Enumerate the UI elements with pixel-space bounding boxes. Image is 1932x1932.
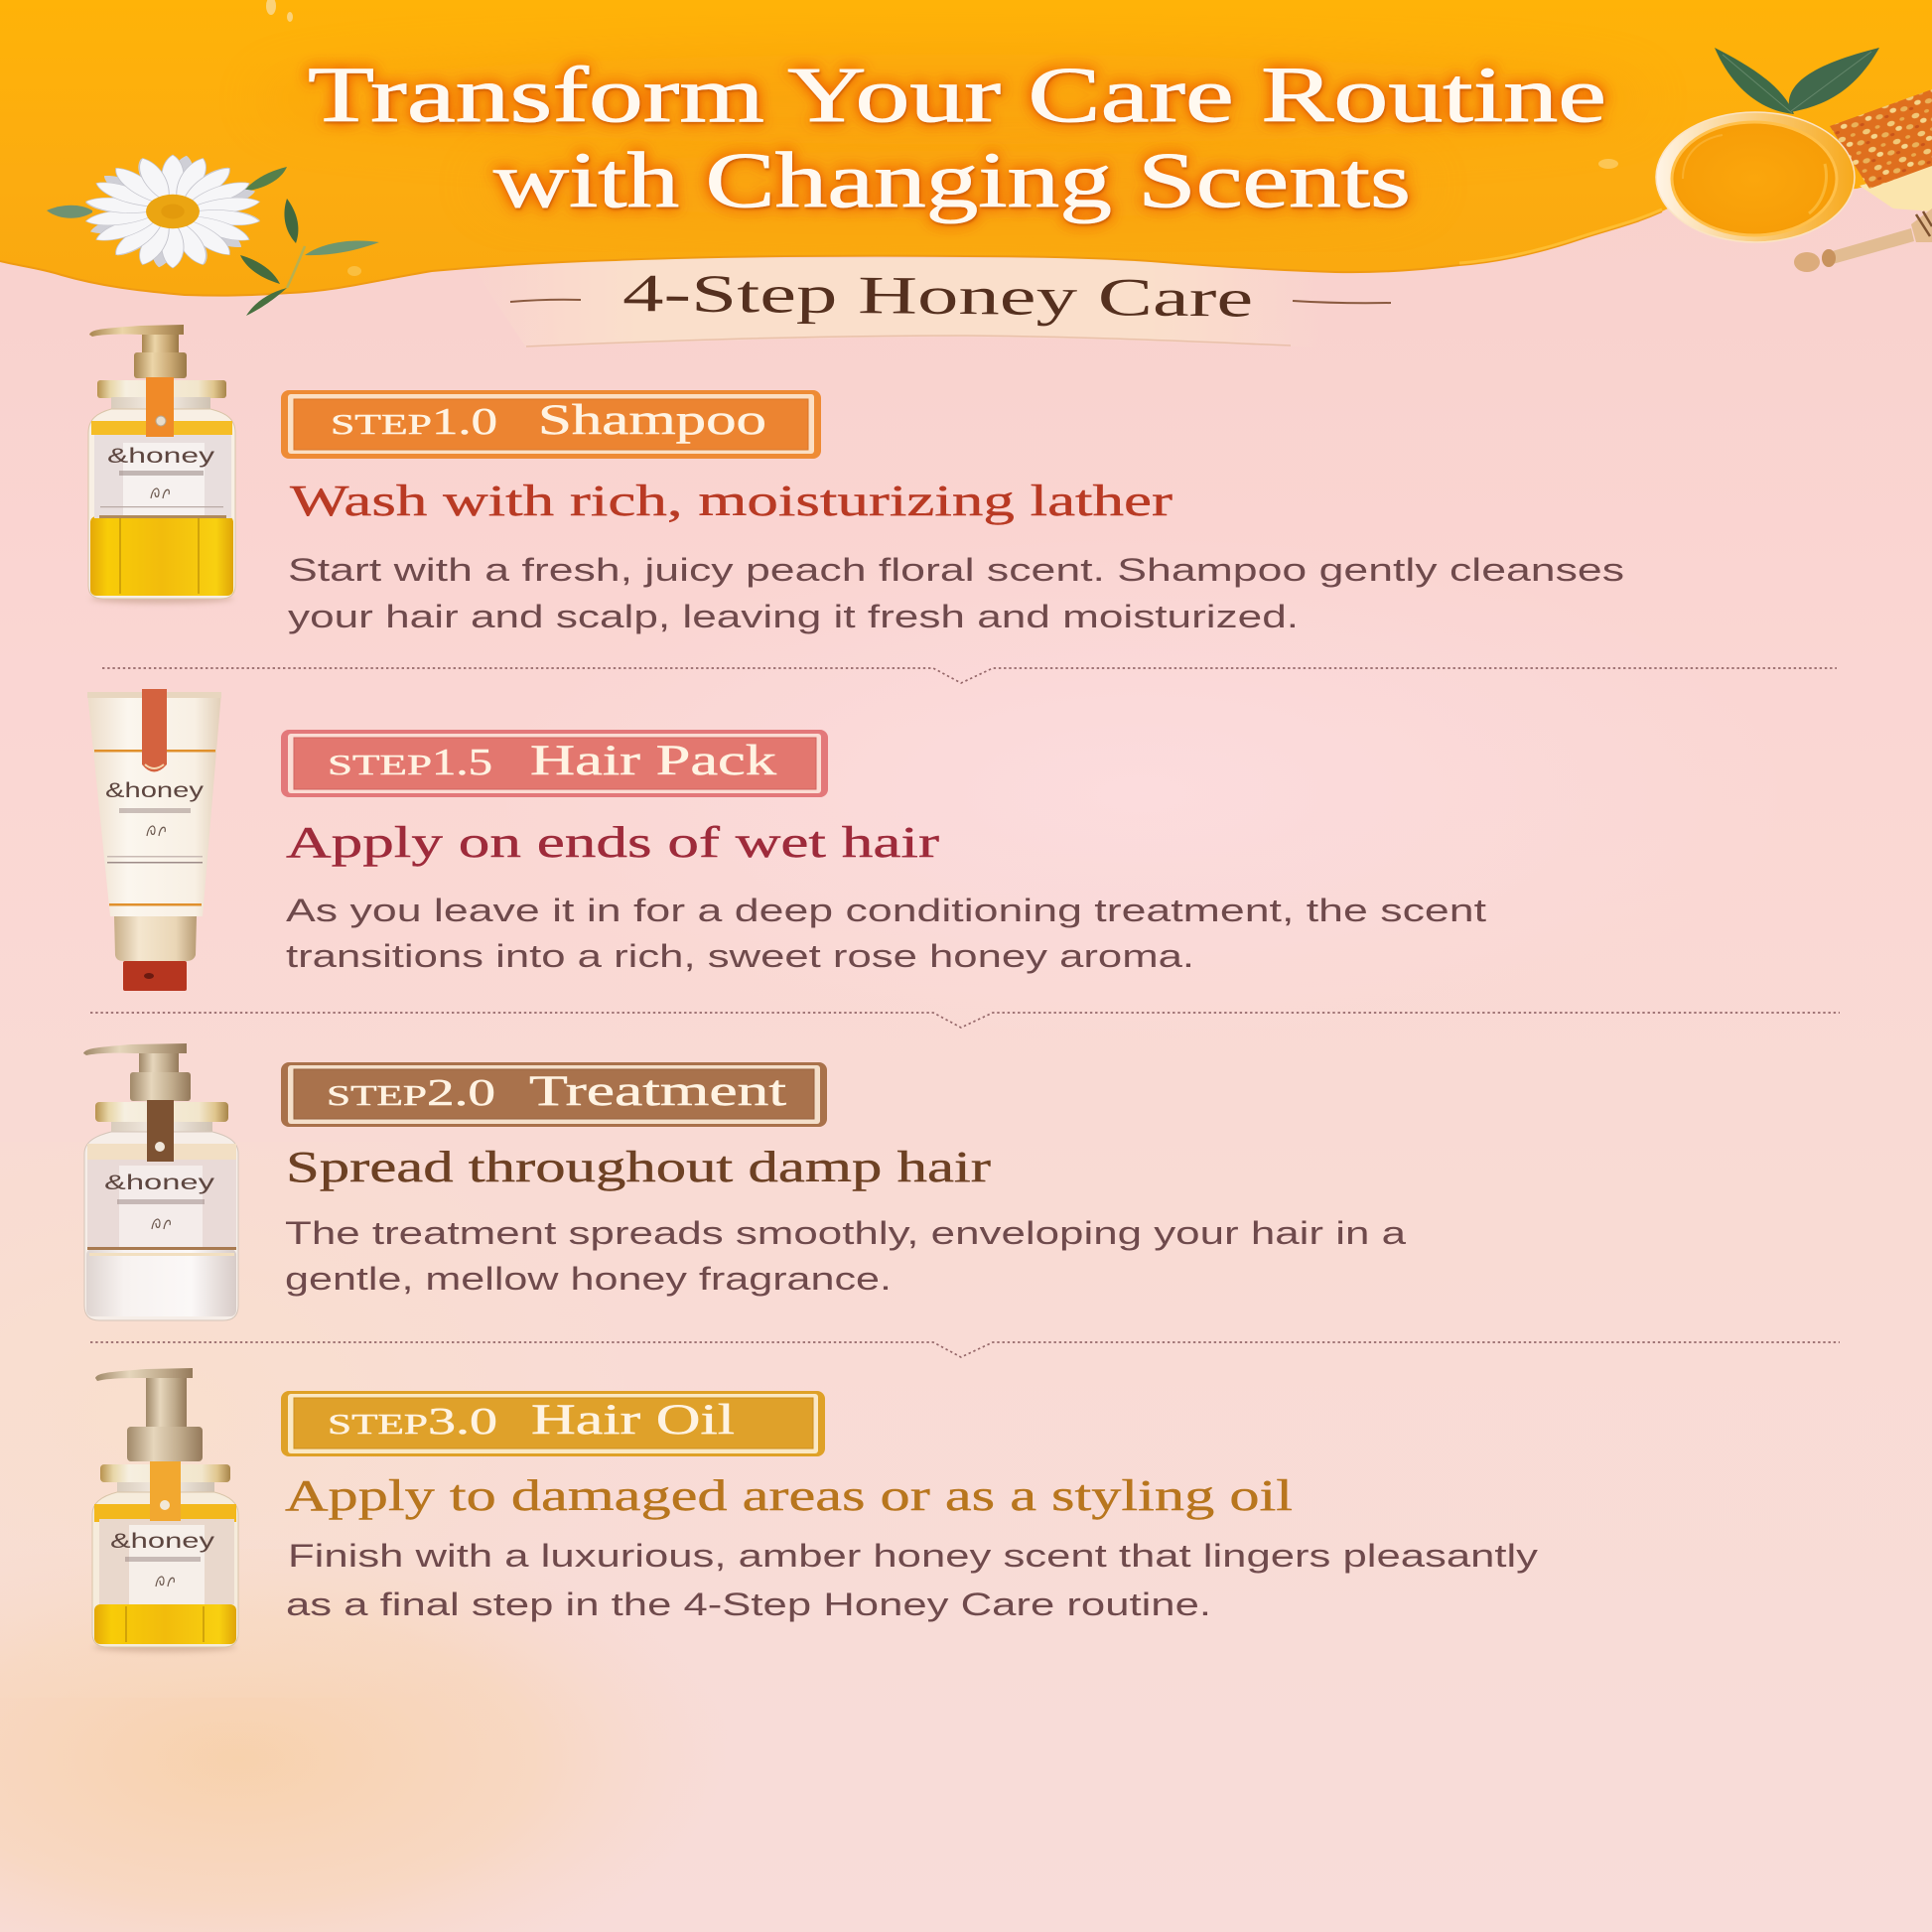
text: step 2.0 description: gentle, mellow honey fragrance. (285, 1261, 892, 1297)
heading: spread throughout damp hair: Spread throughout damp hair (286, 1143, 991, 1191)
step 3.0: hair oil (92, 1368, 1538, 1652)
honey banner (0, 0, 1932, 296)
icon: hair pack tube (87, 689, 221, 991)
badge: step 1.5 hair pack (281, 730, 828, 797)
text: step 1.5 description (286, 893, 1486, 974)
badge: step 1.0 shampoo: Shampoo (538, 397, 766, 444)
text: step 1.5 description: transitions into a rich, sweet rose honey aroma. (286, 938, 1194, 974)
icon: hair pack tube: &honey (105, 779, 205, 802)
text: step 1 description (288, 552, 1624, 634)
title (308, 53, 1606, 224)
badge: step 1.0 shampoo: STEP (331, 410, 432, 441)
badge: step 1.0 shampoo: 1.0 (432, 401, 497, 443)
badge: step 2.0 treatment: Treatment (529, 1068, 786, 1115)
step 1.5: hair pack (87, 689, 1486, 991)
icon: hair oil bottle: &honey (110, 1530, 215, 1553)
badge: step 3.0 hair oil: Hair Oil (531, 1397, 735, 1444)
badge: step 3.0 hair oil: STEP (328, 1410, 428, 1441)
subtitle: 4-Step Honey Care: 4-Step Honey Care (622, 263, 1253, 329)
icon: honey dipper (1794, 208, 1932, 272)
badge: step 1.5 hair pack: 1.5 (432, 742, 492, 783)
badge: step 2.0 treatment: STEP (327, 1081, 427, 1112)
badge: step 2.0 treatment: 2.0 (427, 1072, 495, 1114)
subtitle ribbon (467, 258, 1320, 347)
badge: step 1.0 shampoo (281, 390, 821, 459)
heading: wash with rich, moisturizing lather: Wash with rich, moisturizing lather (290, 477, 1173, 525)
badge: step 3.0 hair oil: 3.0 (428, 1401, 497, 1443)
icon: shampoo bottle (88, 325, 235, 604)
text: step 1 description: your hair and scalp, leaving it fresh and moisturized. (288, 599, 1299, 634)
text: step 2.0 description: The treatment spreads smoothly, enveloping your hair in a (285, 1215, 1406, 1251)
step 1: shampoo (88, 325, 1624, 634)
badge: step 1.5 hair pack: Hair Pack (530, 738, 777, 784)
heading: apply to damaged areas or as a styling oil: Apply to damaged areas or as a styling oil (285, 1471, 1293, 1520)
badge: step 2.0 treatment (281, 1062, 827, 1127)
title: with Changing Scents (493, 138, 1411, 224)
text: step 1 description: Start with a fresh, juicy peach floral scent. Shampoo gently cleanses (288, 552, 1624, 588)
text: step 3.0 description: Finish with a luxurious, amber honey scent that lingers pleasantly (288, 1538, 1538, 1574)
text: step 3.0 description: as a final step in the 4-Step Honey Care routine. (286, 1587, 1211, 1622)
badge: step 1.5 hair pack: STEP (328, 751, 432, 781)
step 2.0: treatment (83, 1043, 1406, 1320)
title: Transform Your Care Routine (308, 53, 1606, 139)
text: step 2.0 description (285, 1215, 1406, 1297)
icon: hair oil bottle (92, 1368, 238, 1652)
badge: step 3.0 hair oil (281, 1391, 825, 1456)
icon: shampoo bottle: &honey (107, 445, 215, 468)
heading: apply on ends of wet hair: Apply on ends of wet hair (286, 818, 939, 867)
icon: treatment bottle: &honey (104, 1172, 215, 1194)
icon: honeycomb (1830, 89, 1932, 211)
icon: treatment bottle (83, 1043, 238, 1320)
text: step 3.0 description (286, 1538, 1538, 1622)
icon: green leaves (1715, 48, 1879, 114)
icon: daisy flower with leaves (47, 147, 379, 316)
text: step 1.5 description: As you leave it in for a deep conditioning treatment, the scent (286, 893, 1486, 928)
icon: honey bowl (1656, 112, 1855, 242)
